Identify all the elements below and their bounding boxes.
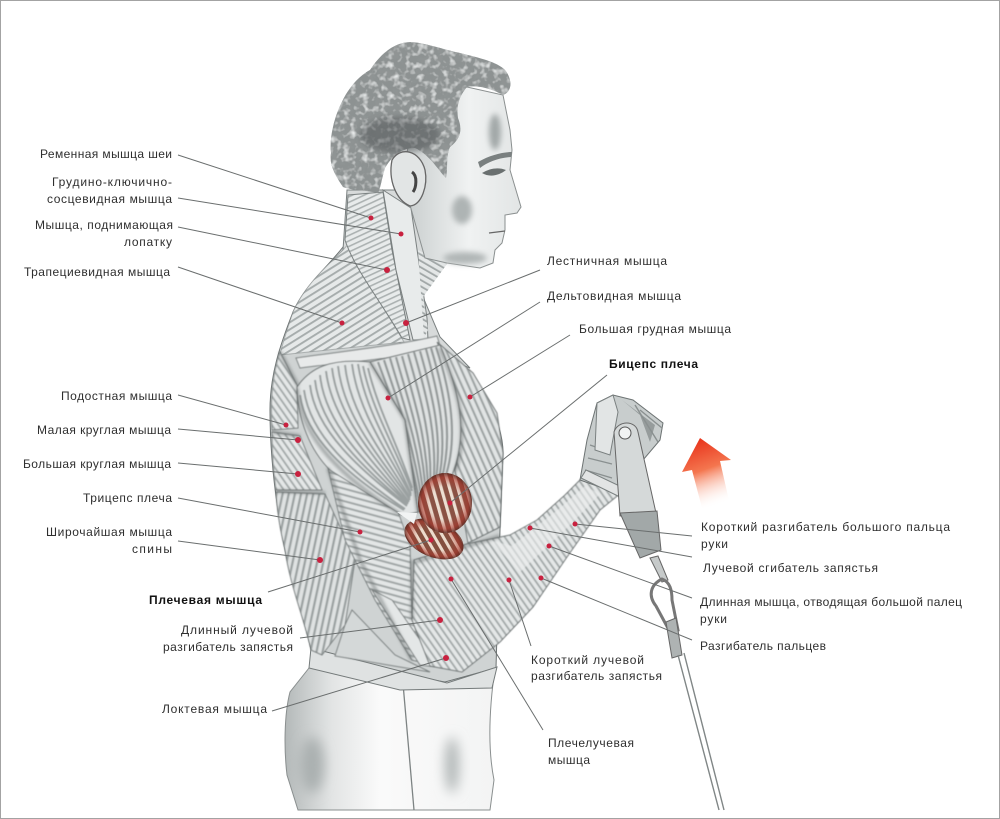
label: pectoralis major: Большая грудная мышца: [579, 322, 731, 336]
clip: [666, 618, 682, 658]
deltoid rear fibers: [300, 364, 412, 510]
label: abductor pollicis longus: Длинная мышца, отводящая большой палец: [700, 595, 962, 609]
label: extensor carpi radialis longus: [163, 623, 293, 654]
hand: [580, 395, 663, 494]
label: extensor carpi radialis brevis: разгибатель запястья: [531, 669, 662, 683]
thumb: [595, 395, 618, 455]
handle bar: [614, 423, 656, 516]
biceps rim: [418, 473, 472, 533]
brachialis: [399, 511, 469, 567]
cable handle: [614, 423, 724, 810]
label: scalene: Лестничная мышца: [547, 254, 667, 268]
arrow: [682, 438, 731, 508]
label: flexor carpi radialis: Лучевой сгибатель запястья: [703, 561, 878, 575]
cable: [678, 653, 724, 810]
deltoid rear: [297, 361, 418, 515]
marker dots: [284, 216, 578, 661]
label: extensor carpi radialis longus: разгибатель запястья: [163, 640, 293, 654]
ear: [391, 152, 426, 206]
pants: [285, 668, 495, 810]
label: anconeus: Локтевая мышца: [162, 702, 267, 716]
forearm: [412, 478, 622, 672]
latissimus: [276, 492, 355, 655]
brachialis stripes: [399, 511, 469, 567]
labels: right column: [531, 254, 962, 767]
label: abductor pollicis longus: руки: [700, 612, 727, 626]
neck silhouette: [300, 190, 470, 368]
carabiner: [651, 579, 678, 632]
eye: [482, 168, 506, 176]
wrist band: [581, 470, 628, 497]
pectoralis: [437, 342, 503, 543]
cheek shading: [452, 196, 472, 224]
abdominal side: [335, 610, 430, 672]
dark hair mass: [360, 117, 440, 153]
face: [405, 87, 521, 268]
triceps: [328, 468, 445, 668]
label: brachioradialis: [548, 736, 634, 767]
forearm tendons: [490, 486, 600, 572]
label: brachialis: Плечевая мышца: [149, 593, 262, 607]
label: infraspinatus: Подостная мышца: [61, 389, 172, 403]
label: sternocleidomastoid: Грудино-ключично-: [52, 175, 172, 189]
tendon: [372, 590, 444, 668]
label: latissimus: [46, 525, 172, 556]
finger creases: [585, 405, 662, 478]
connector: [650, 556, 668, 582]
jaw shading: [443, 252, 487, 264]
label: levator scapulae: Мышца, поднимающая: [35, 218, 173, 232]
biceps stripes: [418, 473, 472, 533]
label: extensor pollicis brevis: Короткий разгибатель большого пальца: [701, 520, 950, 534]
figure: athlete anatomy: [270, 42, 724, 810]
label: latissimus: Широчайшая мышца: [46, 525, 172, 539]
waistband: [309, 648, 497, 690]
label: extensor carpi radialis longus: Длинный лучевой: [181, 623, 293, 637]
label: extensor digitorum: Разгибатель пальцев: [700, 639, 826, 653]
label: levator scapulae: [35, 218, 173, 249]
inner ear: [412, 172, 416, 192]
hair: [331, 42, 510, 193]
muscle crease shadows: [272, 348, 500, 660]
label: brachioradialis: Плечелучевая: [548, 736, 634, 750]
deltoid centre: [370, 345, 461, 512]
biceps: [418, 473, 472, 533]
labels: left column: [23, 147, 293, 716]
deltoid centre fibers: [378, 347, 452, 505]
infraspinatus: [271, 352, 298, 430]
label: extensor carpi radialis brevis: [531, 653, 662, 683]
label: latissimus: спины: [132, 542, 172, 556]
label: trapezius: Трапециевидная мышца: [24, 265, 170, 279]
sternocleidomastoid: [383, 190, 428, 340]
label: teres minor: Малая круглая мышца: [37, 423, 171, 437]
label: deltoid: Дельтовидная мышца: [547, 289, 681, 303]
label: extensor pollicis brevis: руки: [701, 537, 728, 551]
brow: [478, 152, 512, 168]
fingers shading: [622, 400, 655, 442]
teres major: [272, 432, 322, 490]
label: triceps: Трицепс плеча: [83, 491, 172, 505]
biceps tendon: [397, 512, 417, 524]
brachialis rim: [399, 511, 469, 567]
handle pin: [619, 427, 631, 439]
torso silhouette: [270, 247, 503, 682]
collarbone: [296, 336, 440, 368]
trapezius: [280, 240, 404, 355]
label: brachioradialis: мышца: [548, 753, 590, 767]
label: abductor pollicis longus: [700, 595, 962, 626]
label: extensor carpi radialis brevis: Короткий лучевой: [531, 653, 644, 667]
neck: [280, 190, 470, 368]
leader lines: [178, 155, 692, 730]
label: sternocleidomastoid: сосцевидная мышца: [47, 192, 172, 206]
label: biceps: Бицепс плеча: [609, 357, 698, 371]
splenius: [345, 192, 410, 340]
label: teres major: Большая круглая мышца: [23, 457, 171, 471]
muscles: [271, 336, 622, 672]
neck front: [418, 250, 447, 338]
head: [331, 42, 521, 268]
pants seam: [402, 672, 414, 810]
label: extensor pollicis brevis: [701, 520, 950, 551]
label: splenius: Ременная мышца шеи: [40, 147, 172, 161]
sleeve: [620, 511, 661, 558]
label: sternocleidomastoid: [47, 175, 172, 206]
pants body: [285, 668, 495, 810]
forehead shading: [489, 114, 501, 150]
label: levator scapulae: лопатку: [124, 235, 172, 249]
pants shading right: [445, 737, 459, 793]
pants shading left: [300, 737, 324, 793]
mouth: [489, 231, 505, 233]
